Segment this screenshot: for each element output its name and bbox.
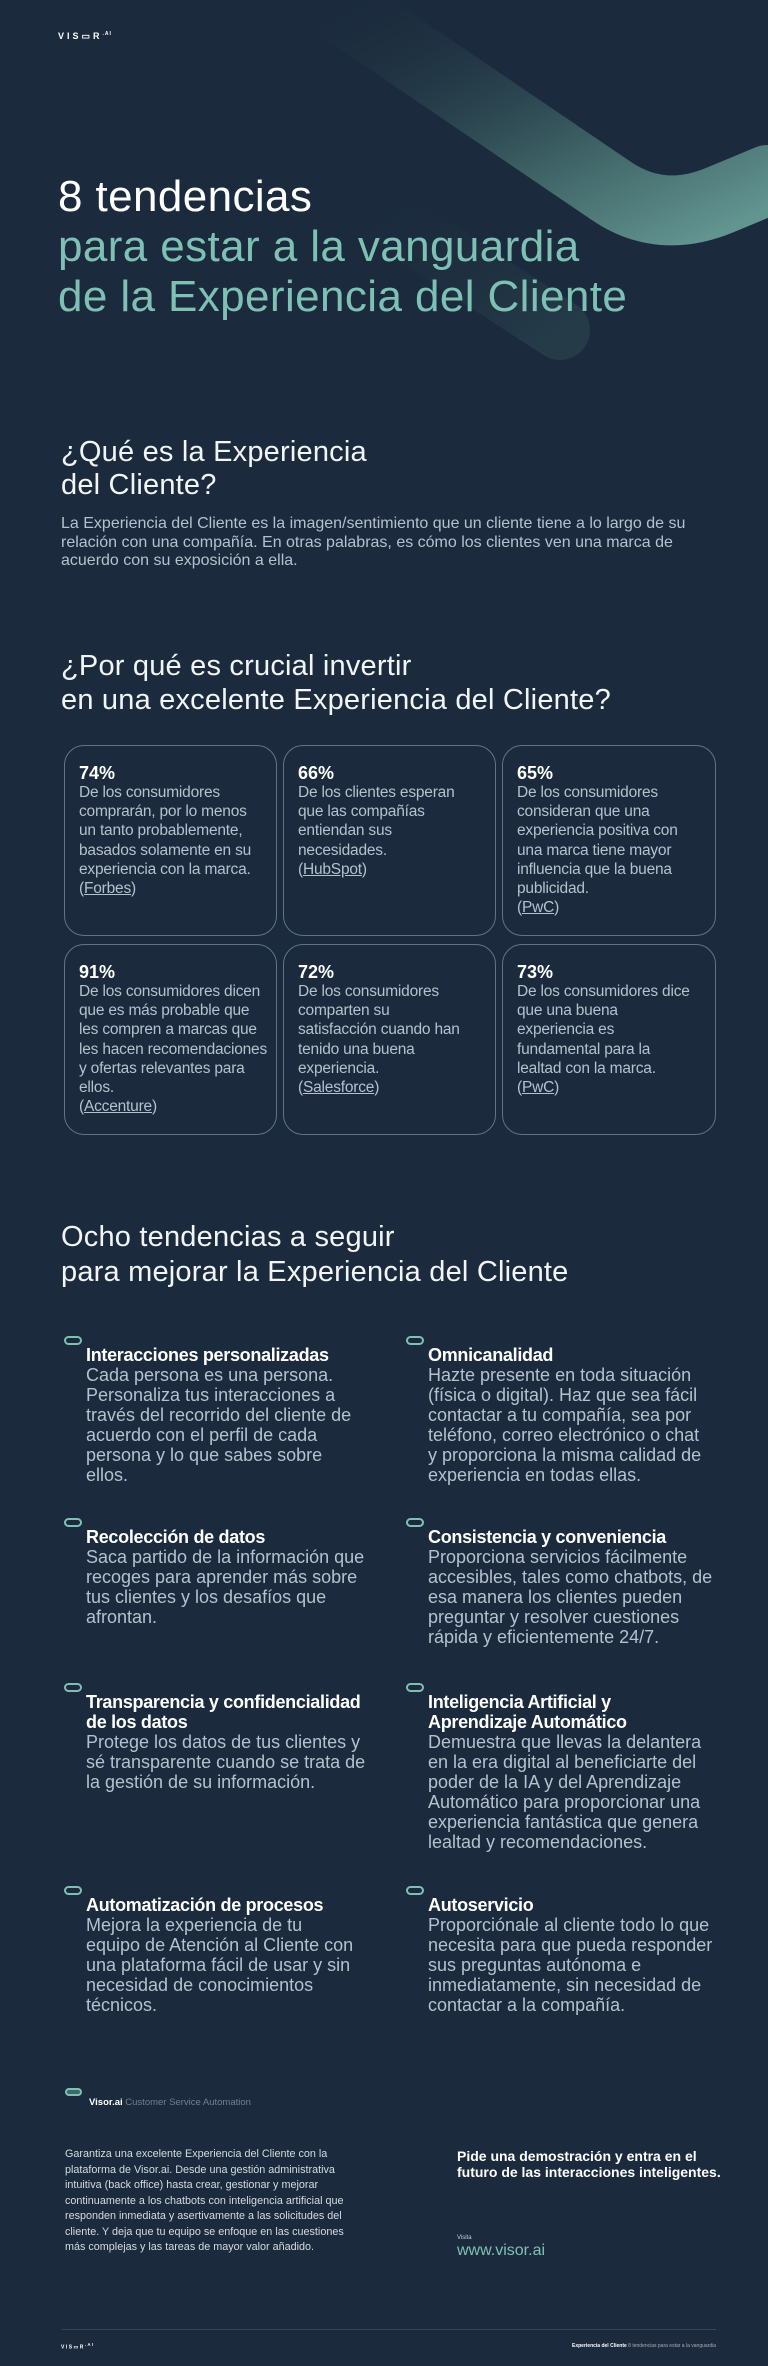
- card 91%: ellos.: [79, 1079, 114, 1096]
- footer paragraph: plataforma de Visor.ai. Desde una gestión administrativa: [65, 2164, 335, 2176]
- footer brand: [65, 2088, 251, 2108]
- card 65%: influencia que la buena: [517, 861, 672, 878]
- trend 1: través del recorrido del cliente de: [86, 1405, 351, 1425]
- heading: ocho tendencias: [61, 1221, 568, 1288]
- trend 7: [64, 1886, 353, 2015]
- card 73%: fundamental para la: [517, 1041, 650, 1058]
- CTA heading: Pide una demostración y entra en el: [457, 2148, 697, 2164]
- trend 8: sus preguntas autónoma e: [428, 1955, 641, 1975]
- trend 2: Hazte presente en toda situación: [428, 1365, 691, 1385]
- trend 2: contactar a tu compañía, sea por: [428, 1405, 691, 1425]
- card 72%: [283, 944, 496, 1135]
- card 65%: una marca tiene mayor: [517, 842, 671, 859]
- footer paragraph: más complejas y las tareas de mayor valor añadido.: [65, 2241, 314, 2253]
- CTA heading: [457, 2148, 721, 2180]
- footer paragraph: continuamente a los chatbots con inteligencia artificial que: [65, 2194, 344, 2206]
- icon: pill: [65, 2088, 82, 2096]
- trend 1: Personaliza tus interacciones a: [86, 1385, 335, 1405]
- card 73%: De los consumidores dice: [517, 983, 690, 1000]
- trend 6: experiencia fantástica que genera: [428, 1812, 698, 1832]
- divider: [62, 2329, 716, 2330]
- trend 8: [406, 1886, 712, 2015]
- trend 2: Omnicanalidad: [428, 1345, 553, 1365]
- title: [58, 172, 627, 321]
- trend 4: Proporciona servicios fácilmente: [428, 1547, 687, 1567]
- heading: ocho tendencias: para mejorar la Experiencia del Cliente: [61, 1256, 568, 1288]
- trend 5: de los datos: [86, 1712, 187, 1732]
- trend 2: (física o digital). Haz que sea fácil: [428, 1385, 697, 1405]
- trend 2: teléfono, correo electrónico o chat: [428, 1425, 699, 1445]
- trend 5: Protege los datos de tus clientes y: [86, 1732, 360, 1752]
- card 74%: experiencia con la marca.: [79, 861, 251, 878]
- trend 6: Automático para proporcionar una: [428, 1792, 700, 1812]
- trend 4: preguntar y resolver cuestiones: [428, 1607, 679, 1627]
- card 91%: les hacen recomendaciones: [79, 1041, 267, 1058]
- trend 1: persona y lo que sabes sobre: [86, 1445, 322, 1465]
- trend 1: Cada persona es una persona.: [86, 1365, 333, 1385]
- trend 4: [406, 1518, 712, 1647]
- CTA heading: futuro de las interacciones inteligentes.: [457, 2164, 721, 2180]
- title: para estar a la vanguardia: [58, 222, 580, 271]
- trend 5: Transparencia y confidencialidad: [86, 1692, 360, 1712]
- card 66%: (HubSpot): [298, 861, 367, 878]
- card 74%: [64, 745, 277, 936]
- card 73%: [502, 944, 716, 1135]
- trend 8: necesita para que pueda responder: [428, 1935, 712, 1955]
- trend 7: equipo de Atención al Cliente con: [86, 1935, 353, 1955]
- visit link: www.visor.ai: [457, 2242, 545, 2259]
- card 65%: consideran que una: [517, 803, 650, 820]
- heading: por qué: ¿Por qué es crucial invertir: [61, 650, 412, 682]
- footer paragraph: responden inmediata y asertivamente a las solicitudes del: [65, 2210, 342, 2222]
- trend 1: ellos.: [86, 1465, 128, 1485]
- visit link: [457, 2234, 545, 2259]
- trend 3: Saca partido de la información que: [86, 1547, 364, 1567]
- card 66%: necesidades.: [298, 842, 387, 859]
- trend 3: recoges para aprender más sobre: [86, 1567, 357, 1587]
- card 66%: 66%: [298, 763, 334, 783]
- card 74%: 74%: [79, 763, 115, 783]
- card 91%: De los consumidores dicen: [79, 983, 260, 1000]
- card 73%: 73%: [517, 962, 553, 982]
- trend 2: [406, 1336, 701, 1485]
- trend 8: contactar a la compañía.: [428, 1995, 625, 2015]
- text: definition: La Experiencia del Cliente es la imagen/sentimiento que un cliente tiene a lo largo de su: [61, 515, 685, 532]
- card 72%: comparten su: [298, 1002, 390, 1019]
- footer paragraph: intuitiva (back office) hasta crear, gestionar y mejorar: [65, 2179, 318, 2191]
- trend 1: Interacciones personalizadas: [86, 1345, 329, 1365]
- trend 6: Demuestra que llevas la delantera: [428, 1732, 701, 1752]
- trend 8: Proporciónale al cliente todo lo que: [428, 1915, 709, 1935]
- trend 7: una plataforma fácil de usar y sin: [86, 1955, 350, 1975]
- card 91%: 91%: [79, 962, 115, 982]
- trend 1: [64, 1336, 351, 1485]
- card 74%: basados solamente en su: [79, 842, 251, 859]
- trend 5: sé transparente cuando se trata de: [86, 1752, 365, 1772]
- heading: qué es: [61, 436, 367, 501]
- footer paragraph: Garantiza una excelente Experiencia del Cliente con la: [65, 2148, 327, 2160]
- trend 5: la gestión de su información.: [86, 1772, 315, 1792]
- heading: qué es: del Cliente?: [61, 469, 217, 501]
- card 65%: [502, 745, 716, 936]
- card 73%: (PwC): [517, 1079, 559, 1096]
- trend 7: Automatización de procesos: [86, 1895, 323, 1915]
- card 72%: experiencia.: [298, 1060, 379, 1077]
- trend 1: acuerdo con el perfil de cada: [86, 1425, 317, 1445]
- card 72%: (Salesforce): [298, 1079, 379, 1096]
- trend 7: Mejora la experiencia de tu: [86, 1915, 302, 1935]
- card 66%: que las compañías: [298, 803, 425, 820]
- logo: VIS▭R.AI: [58, 31, 112, 41]
- trend 6: lealtad y recomendaciones.: [428, 1832, 647, 1852]
- card 91%: y ofertas relevantes para: [79, 1060, 245, 1077]
- trend 8: Autoservicio: [428, 1895, 533, 1915]
- card 91%: les compren a marcas que: [79, 1021, 257, 1038]
- card 65%: (PwC): [517, 899, 559, 916]
- card 73%: lealtad con la marca.: [517, 1060, 656, 1077]
- card 91%: [64, 944, 277, 1135]
- card 74%: De los consumidores: [79, 784, 220, 801]
- title: 8 tendencias: [58, 172, 312, 221]
- trend 6: [406, 1683, 702, 1852]
- card 91%: que es más probable que: [79, 1002, 249, 1019]
- card 74%: (Forbes): [79, 880, 136, 897]
- trend 4: Consistencia y conveniencia: [428, 1527, 666, 1547]
- trend 3: Recolección de datos: [86, 1527, 265, 1547]
- heading: qué es: ¿Qué es la Experiencia: [61, 436, 367, 468]
- trend 5: [64, 1683, 365, 1792]
- heading: ocho tendencias: Ocho tendencias a seguir: [61, 1221, 395, 1253]
- card 66%: De los clientes esperan: [298, 784, 455, 801]
- card 73%: que una buena: [517, 1002, 618, 1019]
- trend 7: técnicos.: [86, 1995, 157, 2015]
- trend 6: poder de la IA y del Aprendizaje: [428, 1772, 681, 1792]
- footer logo: VIS▭R.AI: [61, 2342, 95, 2351]
- text: definition: relación con una compañía. En otras palabras, es cómo los clientes ven una marca de: [61, 534, 673, 550]
- heading: por qué: en una excelente Experiencia del Cliente?: [61, 684, 611, 716]
- title: de la Experiencia del Cliente: [58, 272, 627, 321]
- heading: por qué: [61, 650, 611, 716]
- trend 3: tus clientes y los desafíos que: [86, 1587, 326, 1607]
- trend 8: inmediatamente, sin necesidad de: [428, 1975, 701, 1995]
- text: definition: [61, 515, 685, 569]
- card 65%: publicidad.: [517, 880, 589, 897]
- card 66%: [283, 745, 496, 936]
- card 74%: comprarán, por lo menos: [79, 803, 247, 820]
- footer note: Experiencia del Cliente 8 tendencias para estar a la vanguardia: [572, 2343, 716, 2349]
- card 65%: De los consumidores: [517, 784, 658, 801]
- card 65%: 65%: [517, 763, 553, 783]
- trend 6: Aprendizaje Automático: [428, 1712, 627, 1732]
- footer brand: Visor.ai Customer Service Automation: [89, 2097, 251, 2108]
- card 72%: satisfacción cuando han: [298, 1021, 460, 1038]
- trend 2: y proporciona la misma calidad de: [428, 1445, 701, 1465]
- trend 6: en la era digital al beneficiarte del: [428, 1752, 696, 1772]
- card 72%: 72%: [298, 962, 334, 982]
- visit link: Visita: [457, 2235, 472, 2241]
- trend 4: esa manera los clientes pueden: [428, 1587, 682, 1607]
- card 74%: un tanto probablemente,: [79, 822, 242, 839]
- footer paragraph: [65, 2148, 344, 2253]
- card 66%: entiendan sus: [298, 822, 392, 839]
- trend 3: afrontan.: [86, 1607, 157, 1627]
- trend 6: Inteligencia Artificial y: [428, 1692, 611, 1712]
- trend 7: necesidad de conocimientos: [86, 1975, 313, 1995]
- trend 2: experiencia en todas ellas.: [428, 1465, 641, 1485]
- card 72%: tenido una buena: [298, 1041, 415, 1058]
- trend 4: rápida y eficientemente 24/7.: [428, 1627, 659, 1647]
- footer paragraph: cliente. Y deja que tu equipo se enfoque en las cuestiones: [65, 2226, 344, 2238]
- trend 3: [64, 1518, 364, 1627]
- card 72%: De los consumidores: [298, 983, 439, 1000]
- card 65%: experiencia positiva con: [517, 822, 678, 839]
- text: definition: acuerdo con su exposición a ella.: [61, 552, 298, 569]
- trend 4: accesibles, tales como chatbots, de: [428, 1567, 712, 1587]
- decorative swoosh: [384, 44, 768, 360]
- card 91%: (Accenture): [79, 1098, 157, 1115]
- card 73%: experiencia es: [517, 1021, 614, 1038]
